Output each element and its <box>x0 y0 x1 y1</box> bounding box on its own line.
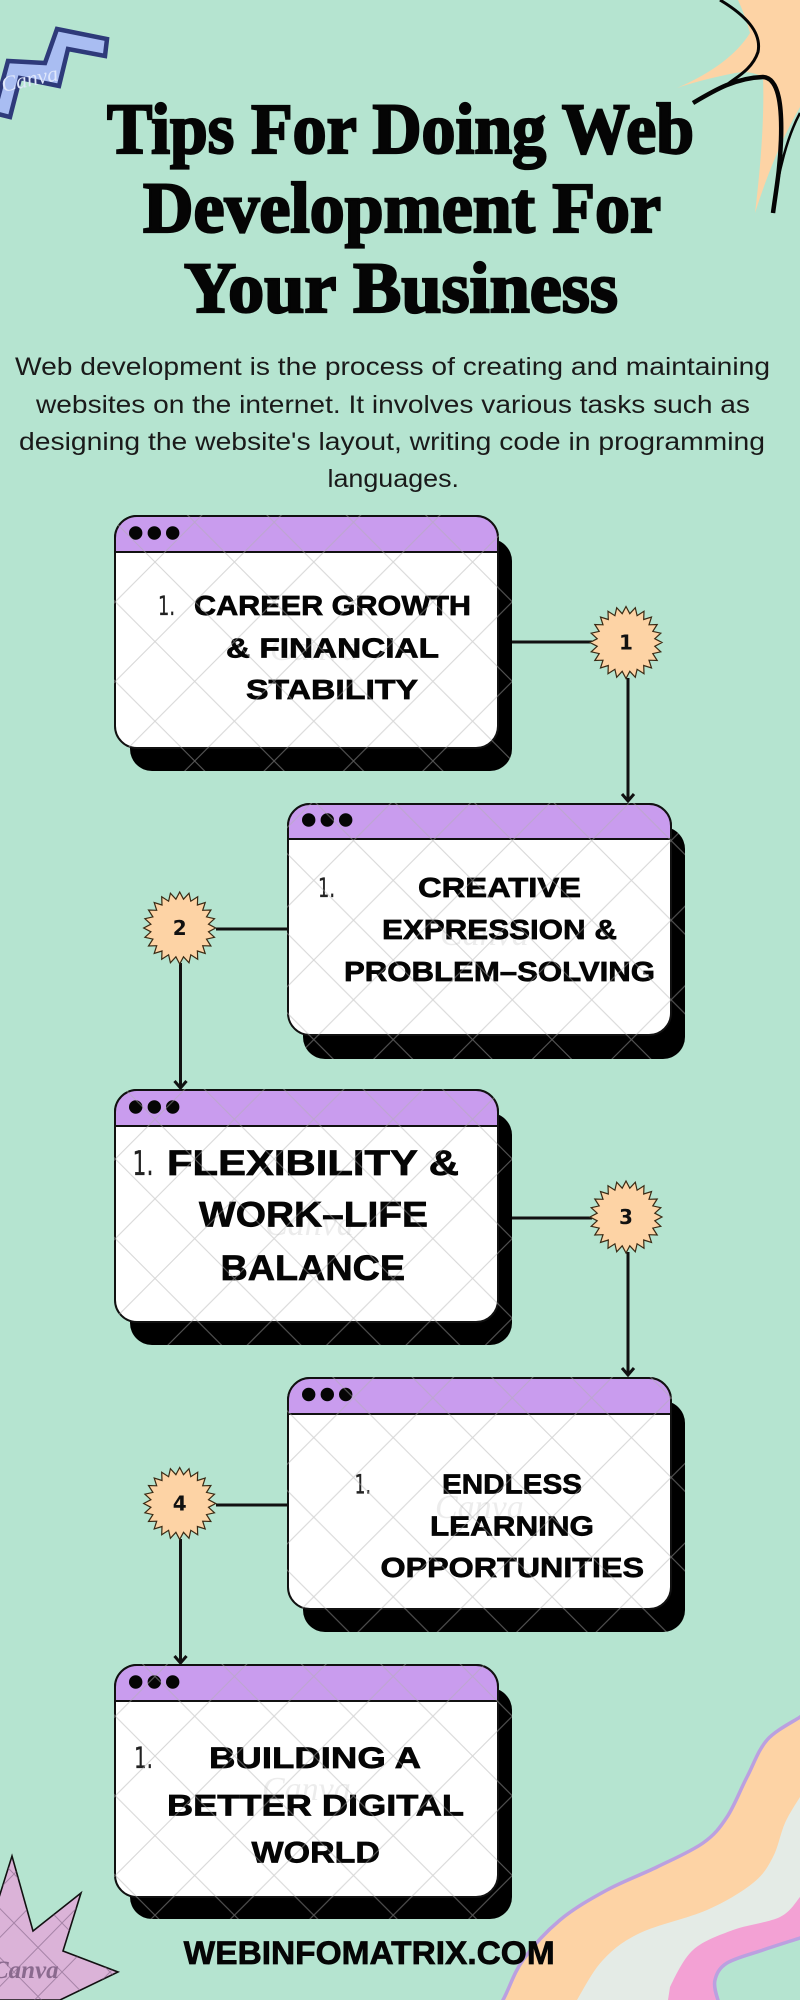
card 2: creative expression: EXPRESSION & <box>382 914 617 945</box>
badge 3: 3 <box>619 1205 633 1229</box>
card 2: creative expression: Canva <box>440 916 529 953</box>
intro text: designing the website's layout, writing code in programming <box>19 428 765 456</box>
card 3: flexibility: FLEXIBILITY & <box>167 1144 459 1183</box>
card 4: endless learning: OPPORTUNITIES <box>380 1552 644 1583</box>
card 1: career growth <box>115 516 512 771</box>
card 3: flexibility: 1. <box>132 1144 154 1184</box>
intro text: websites on the internet. It involves various tasks such as <box>35 391 750 419</box>
decoration: peach burst top right <box>677 0 800 213</box>
card 1: career growth: STABILITY <box>246 674 418 705</box>
decoration: blue zigzag top left <box>0 29 107 117</box>
card 2: creative expression: CREATIVE <box>418 872 581 903</box>
card 5: better digital world: BETTER DIGITAL <box>167 1790 464 1823</box>
intro text: Web development is the process of creating and maintaining <box>15 353 770 381</box>
card 1: career growth: 1. <box>158 591 175 622</box>
card 1: career growth: Canva <box>270 631 359 668</box>
card 5: better digital world: Canva <box>262 1771 351 1808</box>
card 2: creative expression: PROBLEM–SOLVING <box>344 956 655 987</box>
card 4: endless learning: ENDLESS <box>442 1469 582 1500</box>
card 2: creative expression <box>288 804 685 1059</box>
card 5: better digital world: WORLD <box>252 1837 380 1870</box>
card 4: endless learning <box>288 1378 685 1632</box>
badge 2: 2 <box>173 916 187 940</box>
badge 3 <box>590 1181 662 1253</box>
website footer: WEBINFOMATRIX.COM <box>184 1935 555 1971</box>
card 1: career growth: CAREER GROWTH <box>194 590 471 621</box>
connector: card 1 to badge 1 to card 2 <box>512 642 634 801</box>
card 5: better digital world: 1. <box>134 1741 153 1775</box>
decoration: pastel waves bottom right <box>497 1711 800 2000</box>
card 4: endless learning: LEARNING <box>430 1511 594 1542</box>
badge 1 <box>590 606 662 678</box>
card 3: flexibility: BALANCE <box>220 1249 405 1288</box>
card 3: flexibility: Canva <box>265 1206 354 1243</box>
card 3: flexibility <box>115 1090 512 1345</box>
badge 4: 4 <box>173 1492 187 1516</box>
connector: card 3 to badge 3 to card 4 <box>512 1218 634 1375</box>
card 4: endless learning: 1. <box>354 1470 371 1501</box>
connector: card 2 to badge 2 to card 3 <box>174 929 287 1088</box>
title: Tips For Doing Web <box>107 89 694 169</box>
card 4: endless learning: Canva <box>435 1489 524 1526</box>
badge 2 <box>144 892 216 964</box>
badge 4 <box>144 1468 216 1540</box>
card 3: flexibility: WORK–LIFE <box>199 1196 428 1234</box>
card 5: better digital world: BUILDING A <box>209 1742 421 1775</box>
badge 1: 1 <box>619 630 633 654</box>
title: Development For <box>143 168 661 248</box>
card 5: better digital world <box>115 1665 512 1919</box>
card 2: creative expression: 1. <box>318 873 335 904</box>
title: Your Business <box>184 248 618 328</box>
intro text <box>15 353 770 493</box>
connector: card 4 to badge 4 to card 5 <box>174 1505 287 1663</box>
decoration: lilac star bottom left <box>0 1856 118 2000</box>
intro text: languages. <box>328 465 459 493</box>
card 1: career growth: & FINANCIAL <box>226 632 439 664</box>
decoration: blue zigzag top left: Canva <box>0 60 60 97</box>
title <box>107 89 694 328</box>
